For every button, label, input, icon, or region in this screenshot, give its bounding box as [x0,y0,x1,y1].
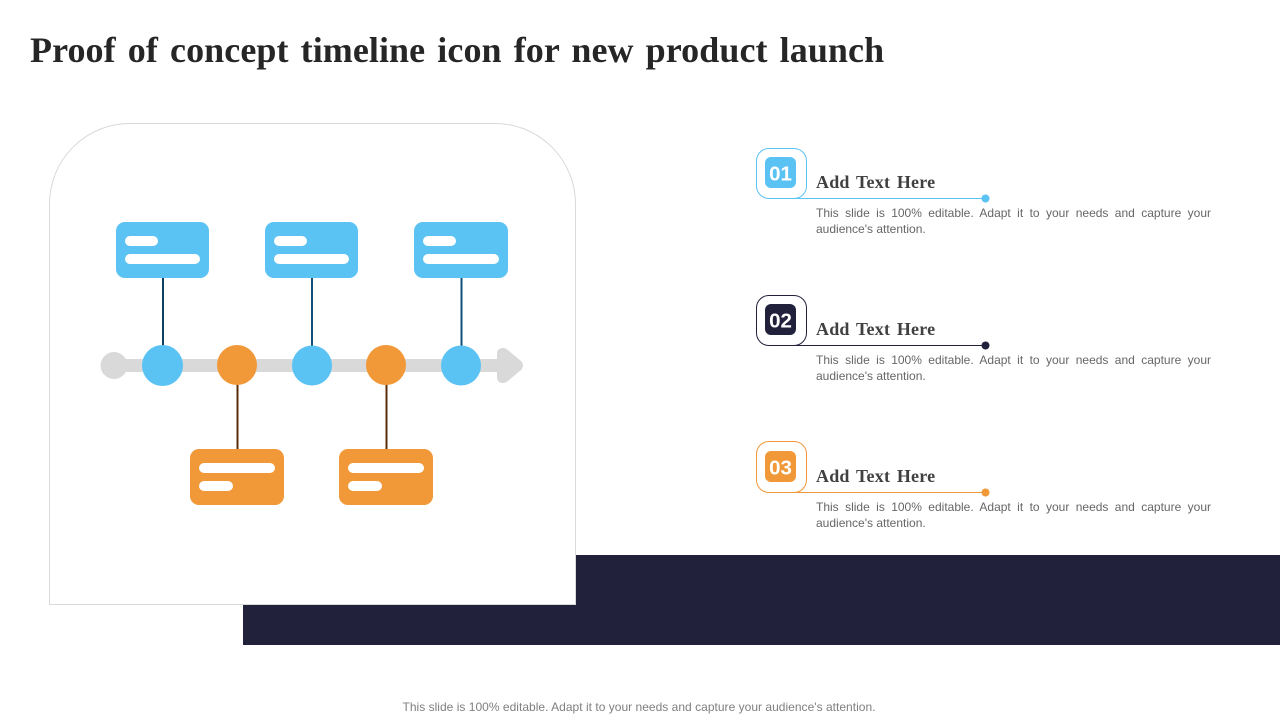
dark accent band [243,555,1280,645]
step 03 [756,441,1211,530]
timeline arrow axis [100,348,523,383]
badge and rule 03: 03 [769,456,792,480]
connectors [163,277,462,450]
callout cards: bottom [190,449,433,505]
step 01 heading: Add Text Here [816,172,935,192]
panel: rounded card [50,124,576,604]
timeline nodes [142,345,481,386]
badge and rule 02 [756,295,990,350]
step 01 text: This slide is 100% editable. Adapt it to your needs and capture your audience's attention. [816,206,1211,236]
step 02 text: This slide is 100% editable. Adapt it to your needs and capture your audience's attention. [816,353,1211,383]
badge and rule 01: 01 [769,162,792,186]
step 02 [756,295,1211,383]
step 03 heading: Add Text Here [816,466,935,486]
title: Proof of concept timeline icon for new product launch [30,30,884,70]
badge and rule 01 [756,148,990,202]
footer note: This slide is 100% editable. Adapt it to your needs and capture your audience's attention. [402,700,876,714]
callout cards: top [116,222,508,278]
step 03 text: This slide is 100% editable. Adapt it to your needs and capture your audience's attention. [816,500,1211,530]
step 02 heading: Add Text Here [816,319,935,339]
badge and rule 02: 02 [769,310,792,332]
step 01 [756,148,1211,236]
badge and rule 03 [756,441,990,496]
